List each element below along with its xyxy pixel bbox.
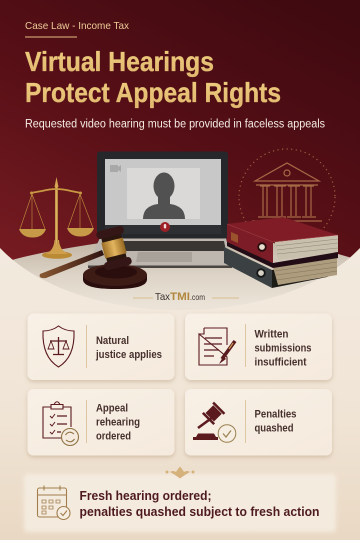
panel: appeal rehearing <box>28 389 174 456</box>
desk surface <box>12 243 352 312</box>
label: submissions <box>254 342 312 354</box>
black binder <box>224 247 337 288</box>
title: Protect Appeal Rights <box>25 77 281 108</box>
title: Virtual Hearings <box>25 46 214 77</box>
panel: written submissions <box>185 314 332 380</box>
label: insufficient <box>254 356 307 368</box>
icon: shield with scales <box>43 326 74 367</box>
sound block <box>83 275 147 289</box>
laptop <box>88 152 232 268</box>
conclusion text: penalties quashed subject to fresh action <box>80 504 320 519</box>
gavel <box>40 225 147 289</box>
label: quashed <box>254 422 294 434</box>
laptop lid <box>97 152 228 238</box>
conclusion text: Fresh hearing ordered; <box>80 488 212 503</box>
laptop screen <box>105 159 221 225</box>
icon: gavel with check <box>193 402 236 442</box>
icon: calendar with check <box>38 486 70 520</box>
label: Penalties <box>254 408 296 420</box>
label <box>254 408 296 434</box>
label: rehearing <box>96 416 140 428</box>
laptop base <box>88 238 232 267</box>
label <box>254 328 312 368</box>
cream arc <box>0 248 360 320</box>
title <box>25 46 281 108</box>
label <box>95 335 162 361</box>
label: ordered <box>96 430 131 442</box>
TaxTMI logo <box>133 291 239 303</box>
icon: clipboard with refresh <box>43 402 78 446</box>
panel: conclusion <box>24 466 336 532</box>
label underline <box>25 36 77 38</box>
handle <box>40 250 104 278</box>
TaxTMI logo: .com <box>190 293 205 302</box>
icon: courthouse in dotted circle <box>239 149 335 245</box>
label: Natural <box>96 335 129 347</box>
icon: document with pen <box>199 328 235 365</box>
category label: Case Law - Income Tax <box>25 20 130 32</box>
icon: scales of justice <box>19 177 94 259</box>
head <box>96 225 132 271</box>
red binder <box>227 217 338 268</box>
label: justice applies <box>95 349 162 361</box>
TaxTMI logo: TMI <box>170 291 190 303</box>
participant silhouette <box>143 172 185 219</box>
icon: camera <box>110 165 121 172</box>
video panel <box>127 168 200 219</box>
panel: natural justice <box>28 314 174 380</box>
ornament divider <box>166 466 194 478</box>
label <box>96 402 140 442</box>
panel: penalties quashed <box>185 389 332 456</box>
maroon header background <box>0 0 360 312</box>
binders <box>224 217 338 288</box>
label: Appeal <box>96 402 128 414</box>
icon: microphone button <box>160 222 170 232</box>
subtitle: Requested video hearing must be provided in faceless appeals <box>25 118 325 130</box>
conclusion text <box>80 488 320 519</box>
label: Written <box>254 328 289 340</box>
TaxTMI logo: Tax <box>155 291 171 303</box>
